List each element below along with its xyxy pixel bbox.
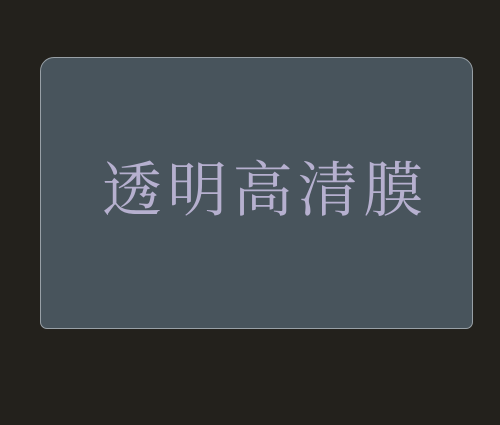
panel: transparent film card — [40, 57, 473, 329]
title: 透明高清膜 — [102, 158, 428, 224]
